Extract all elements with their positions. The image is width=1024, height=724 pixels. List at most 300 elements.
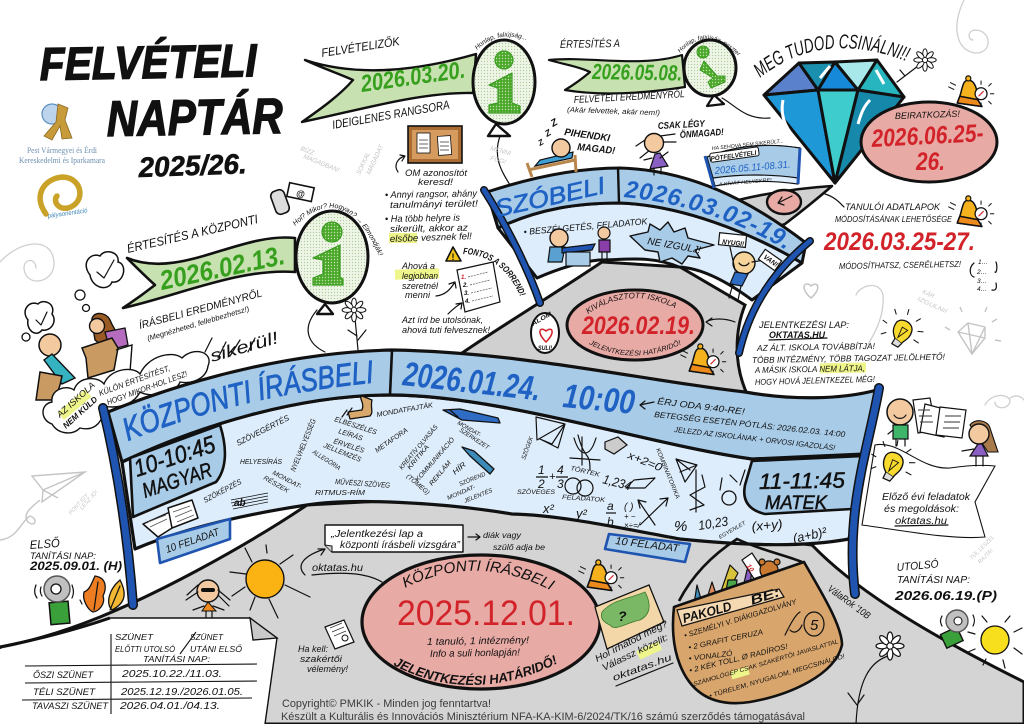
diamond (764, 60, 904, 183)
title: NAPTÁR (106, 88, 283, 147)
block: student data modification: MÓDOSÍTÁSÁNAK LEHETŐSÉGE (835, 215, 953, 224)
gray notes: encouragement: BÍZZ (299, 144, 317, 158)
icon: bell enrolment (949, 76, 994, 106)
block: student data modification (823, 202, 975, 271)
starburst: don't worry: NE IZGULJ! (646, 236, 702, 256)
ellipse: chosen school deadline: 2026.02.19. (581, 312, 695, 340)
school bag (673, 553, 846, 703)
note: order explanation: Ahová a (401, 261, 435, 272)
badge: dream school: SULI! (538, 346, 552, 352)
maths doodles: + (549, 471, 556, 483)
text: rest yourself: MAGAD! (577, 142, 616, 157)
maths doodles: TÖRTEK (570, 464, 601, 479)
panel: matek (744, 456, 864, 514)
ellipse: application deadline: 1 tanuló, 1 intézmény! (427, 635, 529, 648)
make-up exam banner (705, 138, 800, 188)
word cloud: hungarian topics: KREATÍV OLVASÁS (397, 422, 440, 471)
slogan: you can do it: MEG TUDOD CSINÁLNI!! (754, 34, 911, 78)
block: last school day: 2026.06.19.(P) (894, 589, 997, 603)
ribbon: result notification: ÉRTESÍTÉS A (560, 37, 620, 51)
title: 2025/26. (137, 148, 247, 183)
flag: previous tasks (862, 444, 995, 538)
word cloud: hungarian topics: HELYESÍRÁS (240, 457, 282, 466)
school bag: • TÜRELEM, NYUGALOM, MEGCSINÁLOD! (708, 651, 846, 700)
logo: chamber of commerce (19, 104, 105, 165)
panel: magyar (130, 425, 225, 517)
ribbon: written exam results: (Megnézheted, fellebbezhetsz!) (146, 304, 251, 343)
label: magyar time: MAGYAR (139, 459, 215, 503)
maths doodles: EGYENLET (718, 520, 748, 541)
ellipse: application deadline: 2025.12.01. (397, 594, 575, 633)
note: expert opinion (298, 620, 354, 675)
gray notes: encouragement: MENNI (489, 145, 512, 157)
school bag: • 2 GRAFIT CERUZA (688, 627, 764, 652)
label: matek time (759, 467, 846, 514)
icon: warning triangle: ! (452, 252, 454, 262)
icon: scroll (342, 396, 372, 419)
gray notes: encouragement: TÚL LESZEL (968, 534, 996, 561)
icon: ranked list paper: 3. (464, 291, 469, 297)
word cloud: hungarian topics: ÉRVELÉS (332, 436, 366, 455)
icon: bell data sheets (949, 196, 994, 226)
ribbon: admission ranking: Honlap, faliújság... (474, 32, 526, 50)
note: oktatas link: oktatas.hu (312, 563, 363, 574)
handwritten: sikerül: sikerül! (208, 328, 281, 366)
ribbon: written exam results: Hol? Mikor? Hogyan? → Elmondják! (292, 202, 384, 256)
table paper: holidays: 2026.04.01./04.13. (119, 701, 220, 712)
note box: application form (325, 525, 545, 552)
maths doodles: 10,23 (697, 513, 730, 533)
icon: reordered list: 4… (977, 286, 987, 293)
note: rankings: sikerült, akkor az (390, 223, 468, 235)
gray note: no need to worry (916, 288, 948, 316)
block: application form: TÖBB INTÉZMÉNY, TÖBB TAGOZAT JELÖLHETŐ! (752, 352, 946, 365)
banner header (108, 350, 877, 462)
maths doodles: SZÖVEGES (517, 488, 556, 496)
maths doodles: ( ) (624, 502, 633, 513)
ellipse: enrolment: BEIRATKOZÁS! (895, 109, 961, 121)
word cloud: hungarian topics: NYELVHELYESSÉG (289, 417, 318, 473)
note: rankings: • Annyi rangsor, ahány (385, 188, 478, 201)
maths doodles: y² (575, 506, 588, 521)
title: FELVÉTELI (39, 34, 258, 90)
icon: pen (443, 409, 500, 423)
icon: reordered list: 3… (977, 278, 987, 285)
note box: application form: központi írásbeli vizsgára” (340, 539, 460, 551)
word cloud: hungarian topics: MONDATFAJTÁK (376, 400, 434, 419)
logo: career orientation spiral (40, 177, 88, 220)
girl with hair on right (962, 421, 998, 466)
maths doodles: % (674, 518, 687, 535)
note: rankings: elsőbe vesznek fel! (390, 231, 472, 245)
maths doodles: + − (624, 512, 636, 521)
icon: reordered list: 1… (978, 259, 988, 266)
copyright: Készült a Kulturális és Innovációs Minisztérium NFA-KA-KIM-6/2024/TK/16 számú szerződés támogatásával (281, 711, 805, 723)
ribbon: written exam results: 2026.02.13. (156, 240, 287, 296)
icon: phone and envelope: @ (296, 189, 305, 199)
gray notes: encouragement: SOKKAL (355, 151, 372, 176)
gray note: no need to worry: KÁR (921, 288, 936, 300)
icon: sun left (230, 545, 310, 618)
word cloud: hungarian topics: ALLEGÓRIA (310, 447, 343, 472)
table paper: holidays: TANÍTÁSI NAP: (143, 654, 211, 664)
flag: previous tasks: és megoldások: (884, 504, 959, 515)
icon: girl (636, 134, 676, 175)
table paper: holidays: UTÁNI ELSŐ (190, 644, 242, 654)
school bag: PAKOLD (681, 598, 734, 626)
word cloud: hungarian topics: MONDAT- (456, 421, 482, 439)
label: magyar time (131, 431, 219, 503)
school bag: • 2 KÉK TOLL, Ø RADÍROS! (688, 642, 789, 675)
cloud: school sends no notice: HOGY MIKOR-HOL LESZ! (106, 369, 189, 407)
word cloud: hungarian topics: KRITIKA (406, 444, 431, 471)
note: expert opinion: Ha kell: (298, 644, 328, 655)
word cloud: hungarian topics: REKLÁM (427, 458, 453, 487)
gray notes: encouragement (67, 143, 996, 565)
text: rest yourself: Z (548, 117, 561, 130)
table paper: holidays: ELŐTTI UTOLSÓ (115, 644, 175, 654)
ribbon: result notification (548, 34, 740, 117)
ellipse: application deadline: Info a suli honlapján! (430, 647, 520, 660)
table paper: holidays: SZÜNET (115, 632, 154, 642)
block: student data modification: MÓDOSÍTHATSZ, CSERÉLHETSZ! (839, 259, 962, 271)
notes on exam day: JELEZD AZ ISKOLÁNAK + ORVOSI IGAZOLÁS! (673, 425, 837, 452)
logo: chamber of commerce: Pest Vármegyei és Érdi (27, 145, 98, 155)
gray notes: encouragement: MAGADAT (365, 143, 386, 176)
ribbon: written exam results (122, 202, 384, 343)
signature: VálaRok '10B (825, 584, 872, 622)
tag: 10 tasks maths: 10 FELADAT (615, 535, 681, 555)
note box: application form: „Jelentkezési lap a (330, 528, 423, 540)
icon: reordered list (970, 259, 997, 293)
table paper: holidays (0, 618, 277, 724)
icon: ranked list paper: 4. (464, 299, 470, 305)
word cloud: hungarian topics: HÍR (451, 460, 468, 477)
icon: school bell left (35, 576, 82, 625)
ellipse: chosen school deadline (566, 288, 736, 362)
heading: central written exam: KÖZPONTI ÍRÁSBELI (123, 360, 372, 442)
school bag: 5 (810, 617, 819, 634)
text: just be yourself (658, 118, 724, 141)
note: rankings (385, 188, 478, 245)
ellipse: chosen school deadline: JELENTKEZÉSI HATÁRIDŐ! (589, 340, 680, 356)
note: where to write: Hol írhatod meg? (593, 618, 670, 665)
cloud: school sends no notice: NEM KÜLD (61, 394, 99, 430)
banner header (487, 168, 806, 263)
block: application form: AZ ÁLT. ISKOLA TOVÁBBÍTJA! (756, 341, 876, 353)
block: application form (752, 320, 946, 387)
icon: reordered list: 2… (976, 269, 987, 276)
outline above bag (679, 539, 802, 601)
copyright: Copyright© PMKIK - Minden jog fenntartva! (282, 698, 491, 710)
note: OM identifier (396, 155, 467, 188)
icon: paper plane (0, 472, 85, 540)
table paper: holidays: 2025.12.19./2026.01.05. (120, 687, 243, 698)
word cloud: hungarian topics: LEÍRÁS (337, 426, 364, 443)
speaking exam banner (484, 168, 810, 353)
word cloud: hungarian topics: JELLEMZÉS (321, 440, 363, 464)
maths doodles: 2 (537, 477, 545, 491)
word cloud: hungarian topics: SZÓREND (458, 471, 487, 488)
balloon: info 2 (296, 211, 368, 352)
block: first school day: TANÍTÁSI NAP: (30, 551, 97, 561)
maths doodles: b (607, 515, 614, 529)
icon: bell application deadline (579, 560, 624, 590)
note: order explanation: ahová tuti felvesznek! (402, 325, 490, 336)
heading: order matters: FONTOS A SORREND! (463, 248, 526, 296)
note: order explanation: menni (405, 290, 431, 301)
kid with papers (887, 398, 966, 446)
make-up exam banner: PÓTFELVÉTELI (710, 148, 757, 163)
ellipse: application deadline: JELENTKEZÉSI HATÁRIDŐ! (394, 654, 556, 685)
oral exam content (523, 216, 649, 266)
text: rest yourself: Z (536, 137, 546, 148)
badge: dream school: ÁLOM (529, 310, 554, 328)
icon: bell school deadline (681, 344, 726, 374)
block: last school day: TANÍTÁSI NAP: (897, 573, 970, 586)
word cloud: hungarian topics: MONDAT- (271, 470, 303, 491)
block: application form: HOGY HOVÁ JELENTKEZEL MÉG! (755, 374, 876, 387)
block: application form: OKTATAS.HU (769, 330, 825, 340)
icon: phone and envelope (269, 183, 314, 216)
word cloud: hungarian topics: MŰVÉSZI SZÖVEG (335, 477, 390, 490)
icon: notice board (408, 126, 462, 163)
heading: oral exam: SZÓBELI (492, 172, 608, 223)
gray doodle: heart (804, 284, 818, 298)
school bag: 10 (744, 563, 755, 574)
date: central exam: 2026.01.24. (400, 355, 543, 409)
school bag: • SZEMÉLYI V. DIÁKIGAZOLVÁNY (683, 597, 798, 640)
icon: music notes (231, 493, 268, 509)
block: first school day (29, 535, 122, 573)
icon: music notes: ab (234, 498, 246, 509)
block: application form: JELENTKEZÉSI LAP: (758, 320, 850, 330)
block: student data modification: 2026.03.25-27. (823, 228, 975, 256)
table paper: holidays: ŐSZI SZÜNET (33, 670, 95, 680)
notes on exam day: ÉRJ ODA 9:40-RE! (657, 396, 746, 417)
note: order explanation: Azt írd be utolsónak, (401, 315, 483, 326)
date: central exam: 10:00 (561, 377, 637, 422)
small pink ellipse with arrow (767, 190, 844, 214)
icon: thought clouds with ticks (22, 252, 124, 341)
maths doodles: a (607, 499, 614, 513)
note: where to write (593, 618, 674, 686)
copyright (281, 698, 805, 723)
notes on exam day (640, 396, 846, 452)
word cloud: hungarian topics: METAFORA (374, 427, 410, 455)
cloud: school sends no notice (43, 352, 209, 433)
tag: 10 tasks hungarian (157, 519, 230, 563)
label: matek time: 11-11:45 (759, 467, 846, 494)
text: rest yourself (536, 117, 616, 157)
word cloud: hungarian topics: ELBESZÉLÉS (333, 414, 378, 437)
note: where to write: Válassz közelit: (600, 632, 670, 674)
word cloud: hungarian topics: MONDAT- (446, 485, 476, 502)
maths doodles: ×÷=/ (624, 521, 641, 530)
note: order explanation: szeretnél (402, 281, 439, 292)
word cloud: hungarian topics: SZÖVEGÉRTÉS (235, 413, 291, 448)
block: student data modification: TANULÓI ADATLAPOK (845, 202, 941, 213)
icon: flower near balloon (342, 298, 366, 350)
notes on exam day: BETEGSÉG ESETÉN PÓTLÁS: 2026.02.03. 14:00 (654, 410, 846, 439)
school bag: • VONALZÓ (688, 649, 733, 663)
logo: chamber of commerce: Kereskedelmi és Iparkamara (19, 155, 105, 165)
tag: 10 tasks hungarian: 10 FELADAT (164, 526, 222, 556)
text: rest yourself: PIHENDKI (564, 127, 611, 144)
maths doodles: 4 (557, 463, 564, 477)
note: oktatas link (301, 549, 382, 582)
gray doodle: diamond (945, 307, 1001, 354)
note: expert opinion: vélemény! (307, 664, 348, 675)
tag: 10 tasks maths (605, 534, 690, 562)
text: just be yourself: CSAK LÉGY (658, 118, 706, 132)
right post (853, 388, 879, 594)
ribbon: admission ranking: 2026.03.20. (358, 57, 467, 98)
flag: previous tasks: Előző évi feladatok (882, 492, 971, 503)
note: rankings: tanulmányi terület! (390, 198, 478, 211)
text: just be yourself: ÖNMAGAD! (679, 127, 724, 141)
ribbon: admission ranking: FELVÉTELIZŐK (320, 33, 401, 60)
table paper: holidays: TAVASZI SZÜNET (32, 701, 110, 711)
kid with signs: NYUGI! (722, 239, 745, 248)
grass scribble (205, 338, 255, 358)
block: first school day: 2025.09.01. (H) (29, 561, 122, 573)
gray notes: encouragement: MAGADBAN! (302, 153, 340, 174)
bag contents (693, 553, 780, 610)
icon: flower on diamond (897, 49, 936, 82)
title (39, 34, 283, 183)
kid with signs: VAN! (762, 254, 780, 269)
lower grey road (0, 500, 1024, 724)
icon: girl with sunglasses (186, 580, 230, 618)
left post (103, 408, 133, 605)
maths doodles: (a+b)² (792, 524, 829, 546)
block: first school day: ELSŐ (29, 535, 60, 552)
maths doodles: KOMBINATORIKA (654, 448, 680, 500)
maths doodles: (x+y) (751, 516, 783, 534)
kid with signs (718, 233, 782, 300)
maths doodles: FELADATOK (562, 494, 606, 504)
icon: lamp top right (877, 304, 928, 352)
note: order explanation: legjobban (402, 271, 438, 282)
maths doodles (517, 417, 829, 546)
make-up exam banner: HA SEHOVA SEM SIKERÜLT... (711, 138, 784, 152)
flag: previous tasks: oktatas.hu (895, 516, 947, 527)
date: central exam (400, 355, 637, 422)
ellipse: enrolment: 2026.06.25- (870, 119, 984, 153)
icon: ranked list paper (457, 262, 500, 312)
icon: pencil (462, 447, 494, 474)
road wedge below diamond (712, 186, 832, 240)
word cloud: hungarian topics: SZÓKÉPZÉS (202, 477, 243, 505)
ellipse: enrolment: 26. (915, 148, 945, 176)
students at desks (36, 313, 132, 400)
make-up exam banner: 2026.05.11-08.31. (713, 159, 791, 177)
word cloud: hungarian topics: JELENTÉS (462, 487, 494, 505)
cloud: school sends no notice: AZ ISKOLA (54, 380, 97, 420)
left post (484, 190, 540, 303)
balloon: info 1 (473, 40, 535, 200)
icon: autumn leaves (84, 576, 124, 612)
note: where to write: oktatas.hu (611, 652, 674, 684)
label: magyar time: 10-10:45 (131, 431, 219, 483)
block: application form: A MÁSIK ISKOLA NEM LÁTJA, (754, 363, 865, 375)
note: rankings: • Ha több helyre is (385, 213, 460, 225)
icon: lamp on flag (868, 436, 918, 485)
icon: flower bottom right (848, 632, 904, 724)
note: expert opinion: szakértői (300, 654, 343, 665)
ellipse: enrolment (861, 102, 997, 182)
ellipse: chosen school deadline: KIVÁLASZTOTT ISKOLA (586, 292, 676, 314)
block: last school day: UTOLSÓ (896, 557, 940, 574)
icon: ranked list paper: 1. (461, 275, 466, 281)
gray note: no need to worry: IZGULNI! (916, 296, 948, 316)
word cloud: hungarian topics: SZERKEZET (458, 428, 491, 452)
starburst: don't worry (630, 222, 714, 264)
note box: application form: diák vagy (483, 530, 522, 540)
icon: map: ? (618, 608, 627, 624)
ribbon: written exam results: ÍRÁSBELI EREDMÉNYRŐL (137, 285, 264, 332)
note: OM identifier: OM azonosítót (405, 168, 467, 179)
ellipse: application deadline (360, 553, 601, 691)
word cloud: hungarian topics (202, 400, 494, 505)
icon: sun right (968, 616, 1022, 668)
maths doodles: x+2=0 (625, 449, 665, 475)
word cloud: hungarian topics: RITMUS-RÍM (315, 488, 366, 497)
maths doodles: SZÖGEK (520, 435, 535, 461)
note: order explanation (395, 261, 490, 336)
gray notes: encouragement: LESZ JÓ! (78, 489, 100, 511)
right post (739, 241, 810, 353)
icon: map (595, 585, 664, 649)
oral exam content: • BESZÉLGETÉS, FELADATOK (523, 216, 649, 237)
word cloud: hungarian topics: (TOMEG) (405, 473, 431, 497)
upper grey road (436, 262, 748, 396)
ribbon: written exam results: ÉRTESÍTÉS A KÖZPONTI (125, 211, 260, 256)
central banner (103, 350, 879, 605)
word cloud: hungarian topics: RÉSZEK (262, 473, 291, 495)
icon: warning triangle (446, 247, 461, 262)
logo: career orientation spiral: pályaorientáció (46, 207, 88, 220)
icon: ranked list paper: 2. (462, 283, 468, 289)
table paper: holidays: TÉLI SZÜNET (33, 687, 97, 697)
school bag: BE: (748, 584, 781, 608)
banner light body (122, 395, 865, 549)
gray notes: encouragement: PONT ÍGY (67, 492, 90, 516)
ribbon: admission ranking (300, 32, 526, 132)
note: OM identifier: keresd! (418, 177, 453, 188)
word cloud: hungarian topics: KOMMUNIKÁCIÓ (413, 435, 456, 483)
balloon: info 3 (684, 40, 770, 118)
ribbon: result notification: (Akár felvettek, akár nem!) (567, 105, 661, 117)
make-up exam banner: A KÍVÁT HELYEKRE! (717, 176, 773, 188)
maths doodles: 1,234 (601, 471, 633, 493)
icon: person in bed (527, 139, 576, 177)
maths doodles: x² (542, 501, 554, 516)
ribbon: result notification: FELVÉTELI EREDMÉNYRŐL (573, 86, 685, 106)
table paper: holidays: 2025.10.22./11.03. (121, 669, 222, 680)
badge: dream school (529, 310, 559, 353)
maths doodles: 1 (538, 463, 545, 477)
icon: open book (143, 500, 198, 537)
table paper: holidays: SZÜNET (190, 632, 224, 642)
cloud: school sends no notice: KÜLÖN ÉRTESÍTÉST, (98, 364, 171, 398)
ellipse: application deadline: KÖZPONTI ÍRÁSBELI (403, 558, 556, 590)
school bag: SZÁMOLÓGÉP CSAK SZAKÉRTŐI JAVASLATTAL (693, 638, 839, 688)
banner light body (498, 203, 802, 300)
maths doodles: 3 (557, 477, 564, 491)
gray notes: encouragement: RAJTA! (977, 548, 995, 565)
